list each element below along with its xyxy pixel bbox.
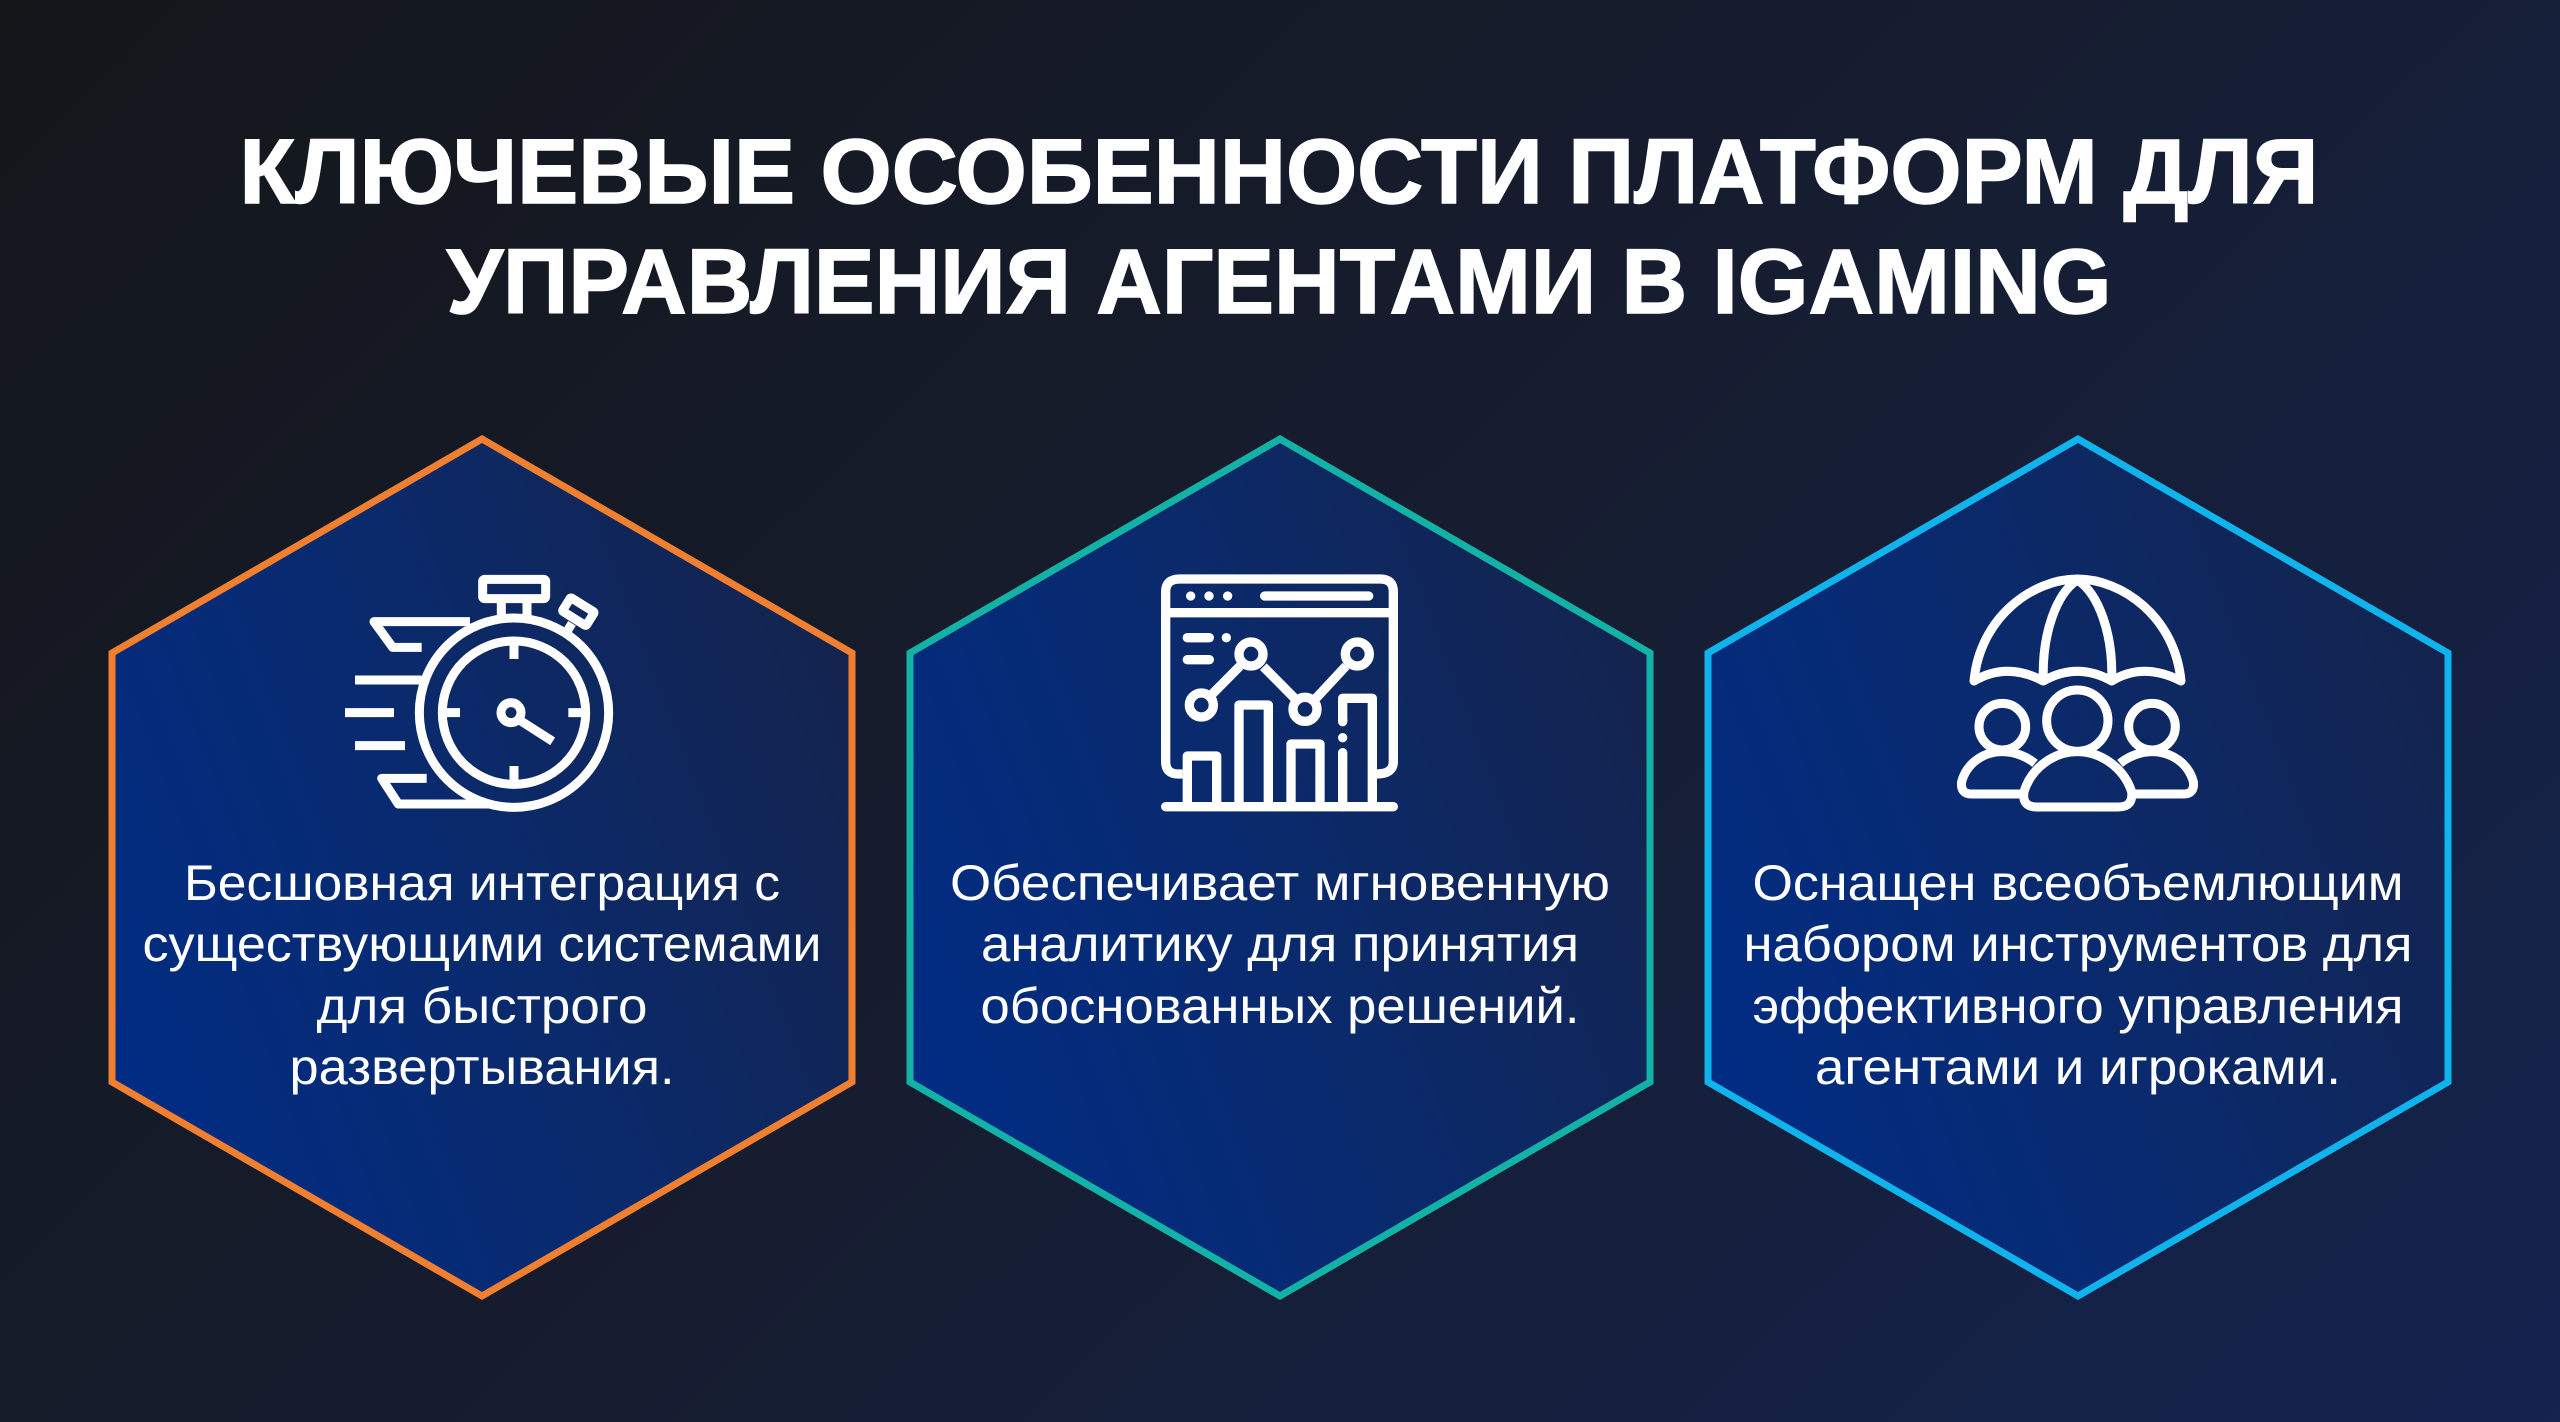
text: card 1 description: Бесшовная интеграция с [184, 855, 780, 911]
text: card 2 description [950, 855, 1610, 1034]
title [240, 121, 2318, 333]
text: card 1 description: развертывания. [290, 1039, 674, 1095]
icon: umbrella over people [1961, 579, 2194, 807]
title: КЛЮЧЕВЫЕ ОСОБЕННОСТИ ПЛАТФОРМ ДЛЯ [240, 121, 2318, 223]
text: card 1 description: для быстрого [316, 978, 648, 1034]
icon: stopwatch [345, 579, 609, 807]
text: card 1 description [142, 855, 822, 1095]
hexagon: teal outline [910, 439, 1650, 1296]
text: card 1 description: существующими системами [142, 916, 822, 972]
text: card 3 description: агентами и игроками. [1815, 1039, 2341, 1095]
hexagon: orange outline [112, 439, 852, 1296]
hexagon: blue outline [1708, 439, 2448, 1296]
text: card 2 description: Обеспечивает мгновенную [950, 855, 1610, 911]
panel: comprehensive toolset [1708, 439, 2448, 1296]
text: card 3 description [1744, 855, 2412, 1095]
title: УПРАВЛЕНИЯ АГЕНТАМИ В IGAMING [446, 231, 2112, 333]
panel: instant analytics [910, 439, 1650, 1296]
panel: seamless integration [112, 439, 852, 1296]
text: card 3 description: Оснащен всеобъемлющим [1752, 855, 2404, 911]
icon: analytics dashboard [1166, 579, 1393, 807]
text: card 2 description: аналитику для принятия [981, 916, 1579, 972]
text: card 3 description: набором инструментов для [1744, 916, 2412, 972]
text: card 3 description: эффективного управления [1752, 978, 2404, 1034]
text: card 2 description: обоснованных решений. [980, 978, 1580, 1034]
